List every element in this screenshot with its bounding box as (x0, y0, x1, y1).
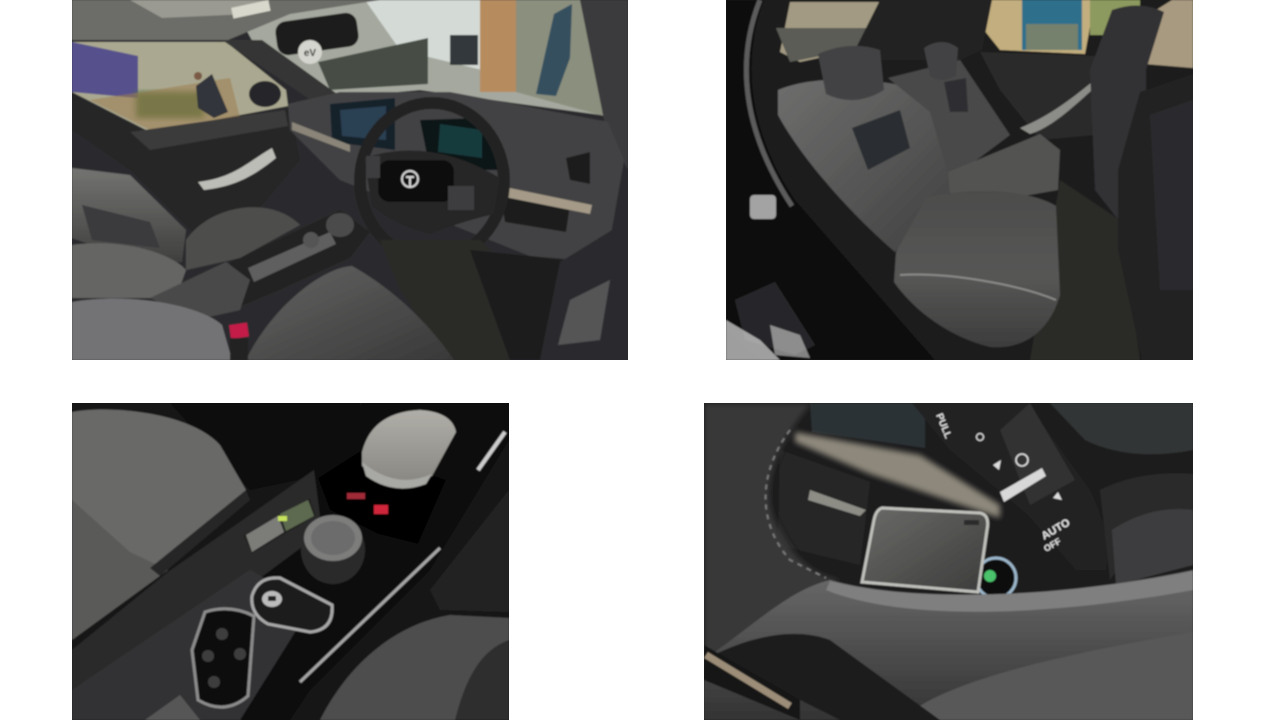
wiper stalk (913, 403, 1076, 552)
paddle shifter (862, 508, 988, 592)
chrome trim (300, 548, 440, 682)
door frame and sill (726, 0, 935, 360)
windscreen view (230, 0, 608, 116)
panel: wiper stalk and paddle shifter photo (704, 403, 1193, 720)
rear windows (780, 2, 890, 62)
front seats (72, 299, 232, 360)
A pillar (225, 39, 336, 98)
panel: centre console with key fobs photo (72, 403, 509, 720)
floor (1030, 180, 1140, 360)
driver seat (72, 168, 186, 262)
seat backrest (778, 42, 1010, 252)
right seat (320, 615, 509, 720)
side window (72, 42, 288, 132)
rear seat cushions (948, 134, 1061, 196)
front seat backs (1090, 5, 1164, 222)
headrests (818, 46, 884, 100)
lower footwell and centre console (470, 250, 471, 251)
background dashboard (810, 403, 925, 448)
panel: rear seats photo (726, 0, 1193, 360)
rear view mirror: eV (304, 48, 316, 59)
roof lining (72, 0, 380, 40)
wiper stalk: PULL (933, 412, 953, 440)
console body (242, 403, 509, 720)
rotary dial (301, 515, 365, 584)
key fob: silver (252, 578, 332, 632)
instrument display (976, 558, 1016, 598)
dashboard (288, 92, 624, 262)
steering wheel (360, 103, 504, 259)
door panel (220, 162, 273, 187)
button cluster (246, 500, 314, 552)
steering wheel spoke (704, 570, 1193, 720)
passenger seat (72, 410, 246, 568)
panel: dashboard and front seats photo (72, 0, 628, 360)
shifter base and selector (318, 410, 456, 544)
person at window (194, 72, 228, 118)
rear view mirror (274, 11, 360, 64)
wiper stalk: AUTO (1040, 517, 1073, 543)
armrest (72, 243, 186, 298)
roof and far door (850, 0, 992, 60)
wiper stalk: OFF (1042, 536, 1063, 554)
key fob: black (192, 609, 254, 707)
steering wheel rim (704, 403, 840, 670)
